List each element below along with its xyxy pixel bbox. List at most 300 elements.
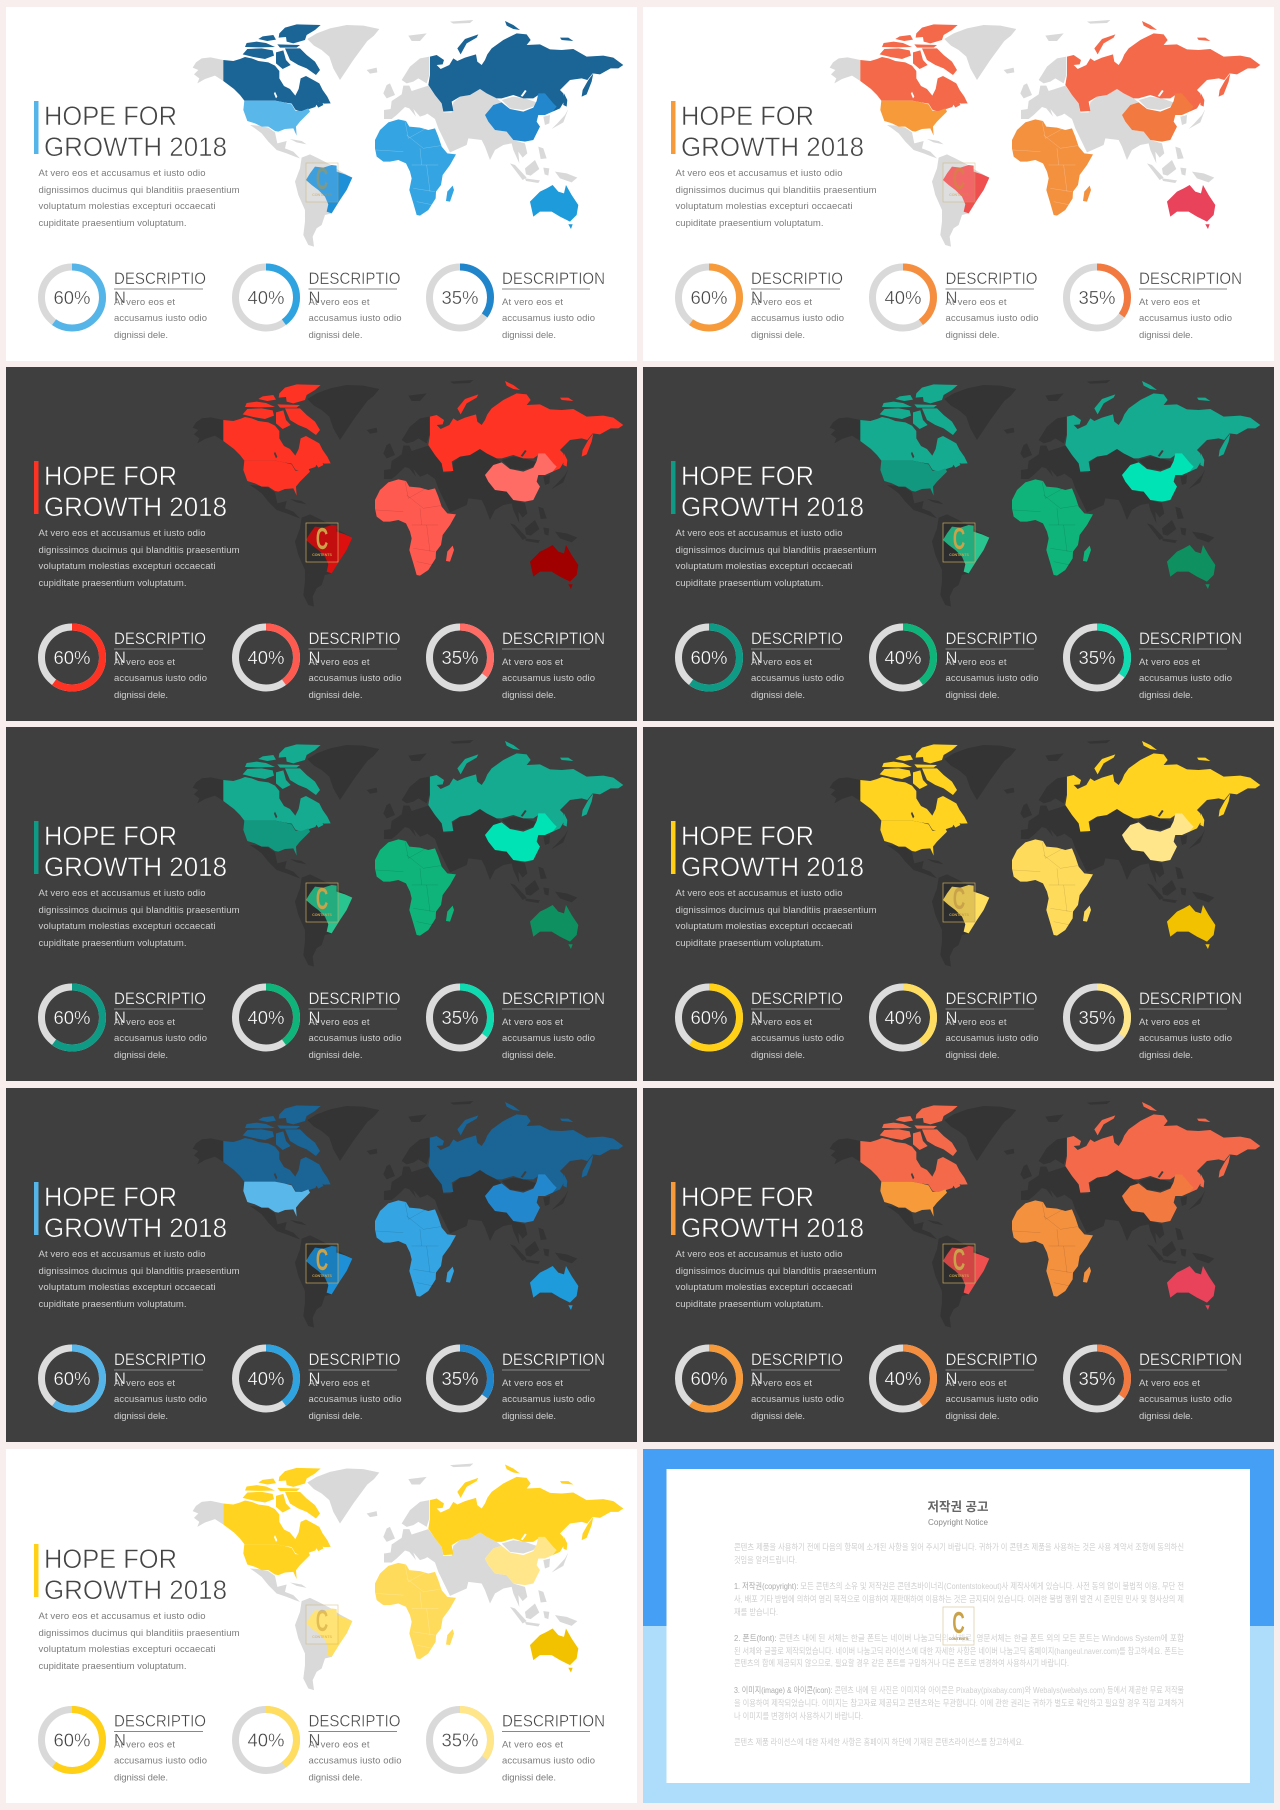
- title: GROWTH 2018: [44, 852, 227, 882]
- body text: [38, 1249, 240, 1310]
- description 2: N: [946, 1009, 957, 1027]
- description 1: [114, 270, 207, 341]
- notice subtitle: Copyright Notice: [928, 1517, 988, 1527]
- donut 35%: 35%: [1078, 647, 1116, 668]
- body text: cupiditate praesentium voluptatum.: [38, 1299, 186, 1310]
- description 3: DESCRIPTION: [502, 630, 605, 648]
- description 3: accusamus iusto odio: [502, 1033, 595, 1044]
- description 2: At vero eos et: [308, 1740, 370, 1750]
- watermark logo: C: [952, 1606, 965, 1640]
- description 2: dignissi dele.: [308, 1050, 362, 1061]
- description 1: accusamus iusto odio: [114, 673, 207, 684]
- body text: [676, 528, 877, 589]
- description 3: At vero eos et: [1139, 1017, 1200, 1028]
- world map: [193, 1463, 623, 1690]
- description 1: dignissi dele.: [114, 1050, 168, 1061]
- body text: cupiditate praesentium voluptatum.: [676, 578, 824, 589]
- watermark logo: [306, 1604, 338, 1644]
- title: GROWTH 2018: [44, 1575, 227, 1605]
- body text: At vero eos et accusamus et iusto odio: [38, 528, 206, 539]
- description 3: DESCRIPTION: [502, 1351, 605, 1369]
- body text: [676, 1249, 877, 1310]
- donut 35%: 35%: [441, 1730, 479, 1750]
- panel: teal map on dark, right: [643, 367, 1274, 721]
- description 1: accusamus iusto odio: [114, 1756, 207, 1766]
- body text: At vero eos et accusamus et iusto odio: [38, 1611, 206, 1622]
- description 1: dignissi dele.: [751, 1411, 805, 1422]
- donut 35%: [430, 627, 490, 688]
- description 2: N: [946, 289, 957, 307]
- description 2: dignissi dele.: [308, 1411, 362, 1422]
- description 2: dignissi dele.: [946, 1411, 1000, 1422]
- description 2: [308, 990, 402, 1061]
- description 2: N: [308, 649, 320, 667]
- donut 35%: 35%: [441, 647, 479, 668]
- panel: orange map on dark: [643, 1088, 1274, 1442]
- description 3: At vero eos et: [1139, 657, 1200, 668]
- watermark logo: CONTENTS: [949, 1637, 969, 1641]
- description 3: dignissi dele.: [1139, 330, 1193, 341]
- donut 35%: [1066, 987, 1128, 1048]
- donut 40%: 40%: [884, 1368, 922, 1389]
- title: GROWTH 2018: [44, 1213, 227, 1243]
- donut 35%: [430, 267, 490, 328]
- body text: [38, 528, 240, 589]
- description 2: At vero eos et: [308, 1017, 370, 1028]
- description 2: [946, 630, 1038, 701]
- donut 60%: [678, 1348, 740, 1409]
- title: [681, 821, 864, 882]
- description 2: accusamus iusto odio: [946, 1394, 1038, 1405]
- description 1: dignissi dele.: [114, 330, 168, 341]
- description 2: At vero eos et: [308, 657, 370, 668]
- description 2: [308, 1712, 402, 1784]
- description 2: accusamus iusto odio: [308, 1033, 402, 1044]
- description 2: dignissi dele.: [946, 330, 1000, 341]
- world map: [193, 380, 623, 607]
- donut 40%: [872, 627, 934, 688]
- donut 40%: [872, 1348, 934, 1409]
- description 1: accusamus iusto odio: [114, 313, 207, 324]
- description 2: accusamus iusto odio: [308, 1756, 402, 1766]
- donut 60%: 60%: [53, 287, 91, 308]
- donut 40%: [236, 627, 296, 688]
- title: [681, 461, 864, 522]
- description 1: N: [114, 649, 126, 667]
- donut 40%: [236, 267, 296, 328]
- body text: dignissimos ducimus qui blanditiis praesentium: [38, 545, 240, 556]
- description 2: DESCRIPTIO: [946, 1351, 1038, 1369]
- description 1: DESCRIPTIO: [751, 630, 843, 648]
- description 2: dignissi dele.: [308, 330, 362, 341]
- description 1: At vero eos et: [114, 1740, 175, 1750]
- watermark logo: [943, 162, 975, 202]
- body text: voluptatum molestias excepturi occaecati: [38, 201, 216, 212]
- body text: At vero eos et accusamus et iusto odio: [676, 168, 842, 179]
- title: HOPE FOR: [44, 821, 177, 851]
- description 1: accusamus iusto odio: [751, 1394, 844, 1405]
- description 2: N: [308, 1009, 320, 1027]
- description 2: accusamus iusto odio: [946, 673, 1038, 684]
- title: HOPE FOR: [44, 101, 177, 131]
- donut 40%: 40%: [884, 1007, 922, 1028]
- description 2: [946, 270, 1038, 341]
- description 2: N: [308, 289, 320, 307]
- body text: cupiditate praesentium voluptatum.: [676, 218, 824, 229]
- description 1: At vero eos et: [751, 657, 812, 668]
- description 3: DESCRIPTION: [1139, 270, 1242, 288]
- body text: At vero eos et accusamus et iusto odio: [38, 1249, 206, 1260]
- description 1: dignissi dele.: [114, 1772, 168, 1784]
- title: GROWTH 2018: [681, 1213, 864, 1243]
- description 3: dignissi dele.: [1139, 1050, 1193, 1061]
- description 2: DESCRIPTIO: [946, 990, 1038, 1008]
- notice body text: 사, 배포 기타 방법에 의하여 영리 목적으로 이용하여 재판매하여 이용하는 것은 금지되어 있습니다. 이러한 불법 행위 발견 시 준민된 민사 및 형사상의 제: [734, 1594, 1184, 1604]
- description 2: N: [308, 1732, 320, 1750]
- body text: cupiditate praesentium voluptatum.: [676, 938, 824, 949]
- panel: yellow map on white: [6, 1449, 637, 1803]
- description 1: [751, 630, 844, 701]
- body text: voluptatum molestias excepturi occaecati: [38, 921, 216, 932]
- donut 35%: [1066, 267, 1128, 328]
- donut 35%: [430, 987, 490, 1048]
- world map: [830, 1101, 1260, 1328]
- description 1: accusamus iusto odio: [114, 1033, 207, 1044]
- body text: voluptatum molestias excepturi occaecati: [676, 1282, 852, 1293]
- description 3: At vero eos et: [1139, 1378, 1200, 1389]
- description 2: dignissi dele.: [946, 1050, 1000, 1061]
- body text: voluptatum molestias excepturi occaecati: [38, 1644, 216, 1655]
- body text: dignissimos ducimus qui blanditiis praesentium: [676, 185, 877, 196]
- watermark logo: [306, 882, 338, 922]
- body text: At vero eos et accusamus et iusto odio: [676, 528, 842, 539]
- body text: At vero eos et accusamus et iusto odio: [38, 888, 206, 899]
- description 2: N: [946, 1370, 957, 1388]
- description 3: dignissi dele.: [1139, 1411, 1193, 1422]
- description 3: At vero eos et: [502, 1740, 563, 1750]
- description 1: [114, 990, 207, 1061]
- description 3: DESCRIPTION: [502, 270, 605, 288]
- description 2: At vero eos et: [308, 297, 370, 308]
- donut 60%: [42, 627, 102, 688]
- notice body text: [734, 1542, 1184, 1747]
- description 1: At vero eos et: [114, 1378, 175, 1389]
- donut 35%: 35%: [441, 1007, 479, 1028]
- panel: teal map on dark, left: [6, 727, 637, 1081]
- description 3: accusamus iusto odio: [502, 673, 595, 684]
- description 2: DESCRIPTIO: [308, 1351, 401, 1369]
- notice body text: 콘텐츠 제품을 사용하기 전에 다음의 항목에 소개된 사항을 읽어 주시기 바랍니다. 귀하가 이 콘텐츠 제품을 사용하는 것은 사용 계약서 조항에 동의하신: [734, 1542, 1184, 1552]
- description 1: N: [751, 1009, 763, 1027]
- donut 60%: 60%: [690, 1007, 728, 1028]
- title: [681, 1182, 864, 1243]
- description 3: DESCRIPTION: [1139, 1351, 1242, 1369]
- description 3: DESCRIPTION: [502, 1712, 605, 1730]
- accent bar: [34, 1182, 38, 1235]
- description 2: [308, 630, 402, 701]
- watermark logo: [943, 1606, 974, 1645]
- body text: dignissimos ducimus qui blanditiis praesentium: [38, 1266, 240, 1277]
- description 2: N: [946, 649, 957, 667]
- description 1: DESCRIPTIO: [114, 990, 206, 1008]
- description 3: dignissi dele.: [502, 1050, 556, 1061]
- description 2: [308, 1351, 402, 1422]
- body text: cupiditate praesentium voluptatum.: [38, 938, 186, 949]
- description 2: dignissi dele.: [308, 1772, 362, 1784]
- notice body text: 3. 이미지(image) & 아이콘(icon): 콘텐츠 내에 된 사진은 이미지와 아이콘은 Pixabay(pixabay.com)와 Webalys(webalys.com) 등에서 제공한 무료 저작물: [734, 1685, 1184, 1695]
- description 1: N: [751, 289, 763, 307]
- title: [681, 101, 864, 162]
- donut 60%: 60%: [690, 647, 728, 668]
- description 1: [751, 1351, 844, 1422]
- title: [44, 461, 227, 522]
- notice body text: 콘텐츠의 합에 제공되지 않으므로, 필요할 경우 같은 폰트를 구입하거나 다른 폰트로 변경하여 사용하시기 바랍니다.: [734, 1658, 1069, 1668]
- description 1: DESCRIPTIO: [114, 1712, 206, 1730]
- donut 60%: [42, 267, 102, 328]
- donut 40%: [236, 987, 296, 1048]
- donut 60%: 60%: [53, 1368, 91, 1389]
- description 1: DESCRIPTIO: [751, 1351, 843, 1369]
- description 1: At vero eos et: [751, 1378, 812, 1389]
- description 3: accusamus iusto odio: [1139, 673, 1232, 684]
- description 3: [1139, 270, 1242, 341]
- donut 60%: [678, 987, 740, 1048]
- body text: cupiditate praesentium voluptatum.: [676, 1299, 824, 1310]
- world map: [830, 20, 1260, 247]
- description 1: accusamus iusto odio: [114, 1394, 207, 1405]
- description 3: dignissi dele.: [502, 1772, 556, 1784]
- title: HOPE FOR: [681, 461, 814, 491]
- donut 35%: [1066, 627, 1128, 688]
- panel: copyright notice: [643, 1449, 1274, 1803]
- donut 35%: 35%: [441, 1368, 479, 1389]
- donut 40%: 40%: [247, 1730, 285, 1750]
- description 2: DESCRIPTIO: [946, 270, 1038, 288]
- description 2: At vero eos et: [308, 1378, 370, 1389]
- description 1: [751, 270, 844, 341]
- body text: cupiditate praesentium voluptatum.: [38, 1661, 186, 1672]
- description 1: [114, 630, 207, 701]
- body text: [676, 888, 877, 949]
- description 2: accusamus iusto odio: [946, 1033, 1038, 1044]
- body text: At vero eos et accusamus et iusto odio: [676, 1249, 842, 1260]
- description 1: dignissi dele.: [114, 1411, 168, 1422]
- title: GROWTH 2018: [681, 492, 864, 522]
- description 2: DESCRIPTIO: [946, 630, 1038, 648]
- donut 60%: 60%: [53, 647, 91, 668]
- title: GROWTH 2018: [681, 132, 864, 162]
- notice body text: 1. 저작권(copyright): 모든 콘텐츠의 소유 및 저작권은 콘텐츠바이너리(Contentstokeout)사 제작사에게 있습니다. 사전 동의 없이 불법적 이용, 무단 전: [734, 1581, 1184, 1591]
- notice body text: 것임을 알려드립니다.: [734, 1555, 797, 1565]
- donut 60%: [42, 987, 102, 1048]
- description 2: accusamus iusto odio: [946, 313, 1038, 324]
- watermark logo: [943, 1243, 975, 1283]
- body text: At vero eos et accusamus et iusto odio: [38, 168, 206, 179]
- description 1: DESCRIPTIO: [114, 630, 206, 648]
- panel: blue map on dark: [6, 1088, 637, 1442]
- body text: dignissimos ducimus qui blanditiis praesentium: [676, 905, 877, 916]
- world map: [193, 1101, 623, 1328]
- description 2: N: [308, 1370, 320, 1388]
- description 2: [946, 990, 1038, 1061]
- description 3: accusamus iusto odio: [502, 1394, 595, 1405]
- accent bar: [671, 461, 676, 514]
- description 1: DESCRIPTIO: [751, 270, 843, 288]
- description 2: dignissi dele.: [946, 690, 1000, 701]
- donut 60%: 60%: [690, 1368, 728, 1389]
- description 1: At vero eos et: [114, 1017, 175, 1028]
- donut 40%: [236, 1710, 296, 1770]
- watermark logo: [943, 522, 975, 562]
- description 1: [114, 1351, 207, 1422]
- body text: voluptatum molestias excepturi occaecati: [38, 561, 216, 572]
- title: HOPE FOR: [44, 461, 177, 491]
- world map: [193, 20, 623, 247]
- panel: blue map on white: [6, 7, 637, 361]
- accent bar: [671, 821, 676, 874]
- description 3: At vero eos et: [502, 1378, 563, 1389]
- description 2: DESCRIPTIO: [308, 630, 401, 648]
- description 1: At vero eos et: [114, 657, 175, 668]
- donut 60%: 60%: [53, 1730, 91, 1750]
- watermark logo: [306, 162, 338, 202]
- watermark logo: [306, 1243, 338, 1283]
- accent bar: [671, 101, 676, 154]
- description 1: DESCRIPTIO: [114, 1351, 206, 1369]
- description 3: At vero eos et: [502, 1017, 563, 1028]
- description 1: accusamus iusto odio: [751, 313, 844, 324]
- description 3: dignissi dele.: [502, 1411, 556, 1422]
- donut 60%: [678, 627, 740, 688]
- description 1: DESCRIPTIO: [751, 990, 843, 1008]
- description 3: accusamus iusto odio: [502, 1756, 595, 1766]
- description 1: dignissi dele.: [751, 1050, 805, 1061]
- body text: dignissimos ducimus qui blanditiis praesentium: [676, 545, 877, 556]
- donut 60%: [42, 1710, 102, 1770]
- accent bar: [34, 101, 38, 154]
- description 3: At vero eos et: [502, 657, 563, 668]
- body text: voluptatum molestias excepturi occaecati: [676, 201, 852, 212]
- title: GROWTH 2018: [44, 492, 227, 522]
- description 2: At vero eos et: [946, 297, 1007, 308]
- description 1: N: [114, 1009, 126, 1027]
- description 3: DESCRIPTION: [502, 990, 605, 1008]
- donut 35%: [430, 1710, 490, 1770]
- description 3: accusamus iusto odio: [1139, 1033, 1232, 1044]
- description 1: At vero eos et: [114, 297, 175, 308]
- donut 40%: 40%: [247, 287, 285, 308]
- title: GROWTH 2018: [681, 852, 864, 882]
- body text: [38, 168, 240, 229]
- description 1: dignissi dele.: [114, 690, 168, 701]
- body text: voluptatum molestias excepturi occaecati: [676, 921, 852, 932]
- description 2: At vero eos et: [946, 1378, 1007, 1389]
- description 3: [502, 1712, 605, 1784]
- description 3: [1139, 630, 1242, 701]
- donut 35%: 35%: [1078, 1007, 1116, 1028]
- description 2: At vero eos et: [946, 657, 1007, 668]
- description 3: accusamus iusto odio: [502, 313, 595, 324]
- notice title: 저작권 공고: [928, 1499, 988, 1514]
- description 3: [502, 990, 605, 1061]
- description 1: N: [751, 649, 763, 667]
- description 1: dignissi dele.: [751, 690, 805, 701]
- body text: cupiditate praesentium voluptatum.: [38, 218, 186, 229]
- donut 40%: [236, 1348, 296, 1409]
- description 2: [946, 1351, 1038, 1422]
- description 1: N: [114, 1370, 126, 1388]
- notice body text: 콘텐츠 제품 라이선스에 대한 자세한 사항은 홈페이지 하단에 기재된 콘텐츠라이선스를 참고하세요.: [734, 1737, 1024, 1747]
- body text: cupiditate praesentium voluptatum.: [38, 578, 186, 589]
- description 2: DESCRIPTIO: [308, 990, 401, 1008]
- donut 35%: [1066, 1348, 1128, 1409]
- title: HOPE FOR: [681, 821, 814, 851]
- description 3: [1139, 1351, 1242, 1422]
- body text: At vero eos et accusamus et iusto odio: [676, 888, 842, 899]
- body text: [38, 1611, 240, 1672]
- title: [44, 101, 227, 162]
- donut 40%: 40%: [884, 647, 922, 668]
- body text: voluptatum molestias excepturi occaecati: [676, 561, 852, 572]
- watermark logo: [943, 882, 975, 922]
- donut 40%: [872, 987, 934, 1048]
- description 1: At vero eos et: [751, 1017, 812, 1028]
- title: [44, 1182, 227, 1243]
- description 2: At vero eos et: [946, 1017, 1007, 1028]
- donut 35%: 35%: [441, 287, 479, 308]
- body text: [38, 888, 240, 949]
- description 3: dignissi dele.: [502, 690, 556, 701]
- description 1: At vero eos et: [751, 297, 812, 308]
- world map: [193, 740, 623, 967]
- donut 40%: 40%: [247, 1368, 285, 1389]
- description 1: dignissi dele.: [751, 330, 805, 341]
- accent bar: [34, 821, 38, 874]
- world map: [830, 380, 1260, 607]
- description 2: accusamus iusto odio: [308, 313, 402, 324]
- donut 40%: 40%: [884, 287, 922, 308]
- description 1: [114, 1712, 207, 1784]
- panel: yellow map on dark: [643, 727, 1274, 1081]
- donut 60%: 60%: [690, 287, 728, 308]
- description 3: accusamus iusto odio: [1139, 1394, 1232, 1405]
- description 3: DESCRIPTION: [1139, 990, 1242, 1008]
- donut 40%: 40%: [247, 1007, 285, 1028]
- title: [44, 821, 227, 882]
- title: HOPE FOR: [681, 1182, 814, 1212]
- title: GROWTH 2018: [44, 132, 227, 162]
- description 3: accusamus iusto odio: [1139, 313, 1232, 324]
- description 2: [308, 270, 402, 341]
- panel: red map on dark: [6, 367, 637, 721]
- world map: [830, 740, 1260, 967]
- description 1: accusamus iusto odio: [751, 1033, 844, 1044]
- notice body text: 2. 폰트(font): 콘텐츠 내에 된 서체는 한글 폰트는 네이버 나눔고딕의 서체로, 영문서체는 한글 폰트 외의 모든 폰트는 Windows System에 포함: [734, 1633, 1184, 1643]
- description 1: DESCRIPTIO: [114, 270, 206, 288]
- body text: voluptatum molestias excepturi occaecati: [38, 1282, 216, 1293]
- description 3: dignissi dele.: [502, 330, 556, 341]
- donut 35%: [430, 1348, 490, 1409]
- body text: [676, 168, 877, 229]
- notice body text: 된 서체와 글꼴로 제작되었습니다. 네이버 나눔고딕 라이선스에 대한 자세한 사항은 네이버 나눔고딕 홈페이지(hangeul.naver.com)를 참고하세요. 폰트는: [734, 1646, 1184, 1656]
- title: HOPE FOR: [681, 101, 814, 131]
- body text: dignissimos ducimus qui blanditiis praesentium: [676, 1266, 877, 1277]
- accent bar: [34, 1544, 38, 1597]
- description 2: accusamus iusto odio: [308, 673, 402, 684]
- description 3: At vero eos et: [502, 297, 563, 308]
- title: [44, 1544, 227, 1605]
- description 3: [1139, 990, 1242, 1061]
